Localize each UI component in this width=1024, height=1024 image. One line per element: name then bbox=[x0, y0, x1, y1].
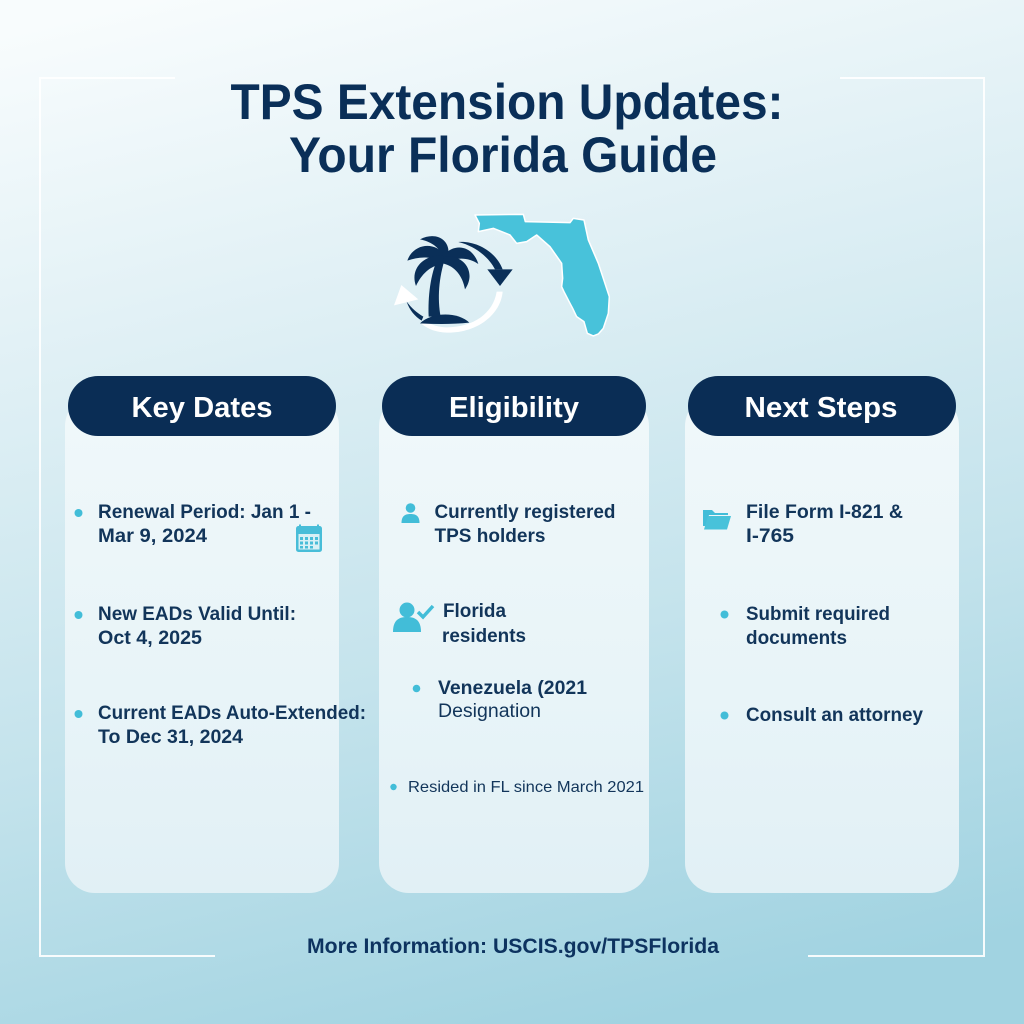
text block: submit documents bbox=[720, 603, 890, 649]
heading: Next Steps: Next Steps bbox=[744, 392, 898, 424]
text block: current EADs: Current EADs Auto-Extended: bbox=[98, 702, 366, 724]
text block: renewal period bbox=[74, 501, 311, 547]
text block: file forms bbox=[746, 501, 903, 547]
text block: current EADs bbox=[74, 702, 366, 748]
text block: Florida residents bbox=[442, 600, 526, 647]
text block: Venezuela designation: Venezuela (2021 bbox=[438, 677, 587, 699]
text block: current EADs: To Dec 31, 2024 bbox=[98, 726, 243, 748]
text block: registered holders bbox=[434, 501, 616, 547]
icon: person with check bbox=[393, 602, 433, 632]
icon: Florida map bbox=[475, 214, 609, 336]
heading: Key Dates bbox=[68, 376, 336, 436]
icon: person bbox=[402, 503, 420, 523]
heading: Eligibility bbox=[382, 376, 646, 436]
title: Your Florida Guide bbox=[289, 127, 717, 183]
icon: palm tree with renewal arrows bbox=[394, 236, 513, 333]
text block: new EADs: New EADs Valid Until: bbox=[98, 603, 296, 625]
text block: renewal period: Mar 9, 2024 bbox=[98, 525, 207, 547]
text block: renewal period: Renewal Period: Jan 1 - bbox=[98, 501, 311, 523]
text block: residence: Resided in FL since March 2021 bbox=[408, 779, 644, 796]
text block: Venezuela designation: Designation bbox=[438, 701, 541, 722]
title bbox=[230, 74, 784, 183]
text block: file forms: I-765 bbox=[746, 525, 794, 547]
text block: file forms: File Form I-821 & bbox=[746, 501, 903, 523]
heading: Key Dates: Key Dates bbox=[132, 392, 272, 424]
text block: new EADs bbox=[74, 603, 296, 649]
panel: Next Steps bbox=[685, 376, 959, 893]
text block: Venezuela designation bbox=[413, 677, 587, 722]
title: TPS Extension Updates: bbox=[230, 74, 784, 130]
panel: Key Dates bbox=[65, 376, 366, 893]
text block: registered holders: Currently registered bbox=[434, 501, 616, 523]
text block: consult attorney: Consult an attorney bbox=[746, 704, 923, 726]
text block: Florida residents: residents bbox=[442, 625, 526, 647]
text block: submit documents: documents bbox=[746, 627, 847, 649]
text block: registered holders: TPS holders bbox=[434, 525, 546, 547]
icon: calendar bbox=[296, 524, 322, 552]
heading: Next Steps bbox=[688, 376, 956, 436]
text block: new EADs: Oct 4, 2025 bbox=[98, 627, 202, 649]
text block: Florida residents: Florida bbox=[443, 600, 506, 622]
footer link: More Information: USCIS.gov/TPSFlorida bbox=[307, 935, 719, 958]
panel: Eligibility bbox=[379, 376, 649, 893]
text block: submit documents: Submit required bbox=[746, 603, 890, 625]
heading: Eligibility: Eligibility bbox=[449, 392, 579, 424]
icon: folder bbox=[703, 510, 731, 530]
